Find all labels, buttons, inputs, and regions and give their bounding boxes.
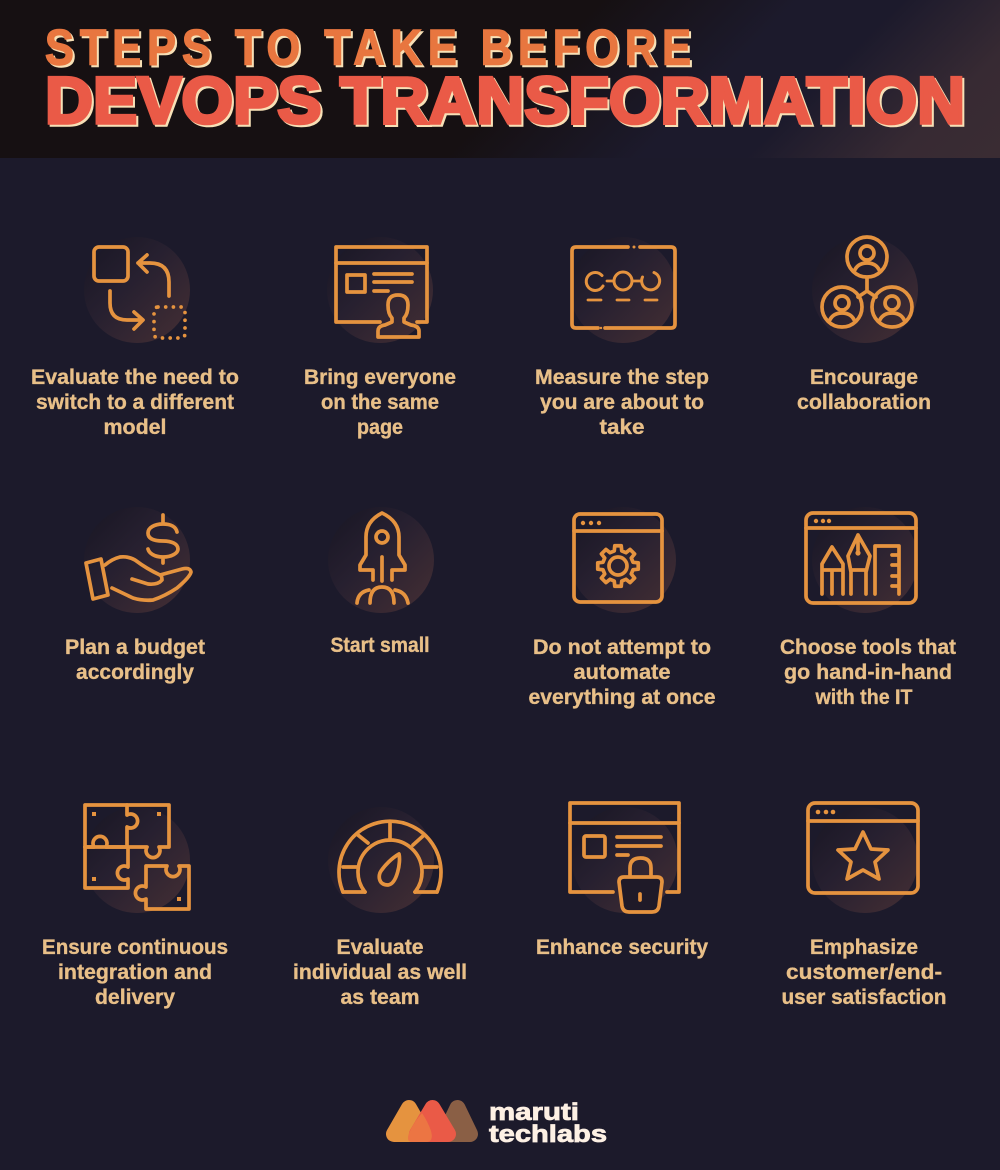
label: Ensure continuous [42, 935, 228, 959]
label: everything at once [528, 685, 716, 709]
label: Start small [330, 633, 430, 657]
logo: maruti techlabs [394, 1099, 607, 1148]
panel: evaluate individual and team [293, 807, 467, 1009]
label: accordingly [76, 660, 194, 684]
label: model [104, 415, 166, 439]
label: customer/end- [786, 960, 942, 984]
label: collaboration [797, 390, 931, 414]
label: switch to a different [36, 390, 234, 414]
icon: browser with gear [570, 507, 676, 613]
label: Emphasize [810, 935, 918, 959]
title: DEVOPS TRANSFORMATION [47, 65, 967, 139]
title: STEPS TO TAKE BEFORE [47, 22, 699, 78]
icon: browser with padlock [570, 803, 679, 913]
wordmark: techlabs [489, 1121, 607, 1148]
icon: browser with person [327, 237, 433, 343]
label: on the same [321, 390, 439, 414]
icon: measurement panel [570, 237, 676, 343]
icon: gauge [328, 807, 441, 913]
icon: hand holding dollar [84, 507, 191, 613]
label: Plan a budget [65, 635, 205, 659]
icon: switching squares [84, 237, 190, 343]
icon: browser with star [808, 803, 918, 913]
label: page [357, 415, 403, 439]
icon: browser with design tools [806, 507, 918, 613]
panel: evaluate the need [31, 237, 239, 439]
panel: measure the step [535, 237, 709, 439]
label: automate [574, 660, 671, 684]
panel: enhance security [536, 803, 708, 959]
label: Bring everyone [304, 365, 456, 389]
label: take [600, 415, 645, 439]
header band [0, 0, 1000, 158]
panel: bring everyone on the same page [304, 237, 456, 439]
label: with the IT [815, 685, 912, 709]
label: Evaluate the need to [31, 365, 239, 389]
label: Enhance security [536, 935, 708, 959]
label: you are about to [540, 390, 704, 414]
icon: rocket [328, 507, 434, 613]
title [45, 20, 967, 139]
title: DEVOPS TRANSFORMATION [45, 63, 965, 137]
icon: three connected people [812, 237, 918, 343]
label: integration and [58, 960, 212, 984]
panel: encourage collaboration [797, 237, 931, 414]
panel: start small [328, 507, 434, 657]
title: STEPS TO TAKE BEFORE [45, 20, 697, 76]
label: Do not attempt to [533, 635, 711, 659]
label: user satisfaction [782, 985, 946, 1009]
label: Encourage [810, 365, 918, 389]
wordmark: maruti [489, 1099, 579, 1126]
label: delivery [95, 985, 175, 1009]
icon: puzzle pieces [84, 805, 190, 913]
panel: continuous integration [42, 805, 228, 1009]
label: go hand-in-hand [784, 660, 952, 684]
label: individual as well [293, 960, 467, 984]
panel: do not automate everything [528, 507, 716, 709]
panel: emphasize customer satisfaction [782, 803, 946, 1009]
label: Evaluate [336, 935, 424, 959]
label: as team [340, 985, 420, 1009]
label: Choose tools that [780, 635, 956, 659]
label: Measure the step [535, 365, 709, 389]
panel: plan a budget [65, 507, 205, 684]
icon: logo mountains [394, 1108, 470, 1142]
panel: choose tools [780, 507, 956, 709]
